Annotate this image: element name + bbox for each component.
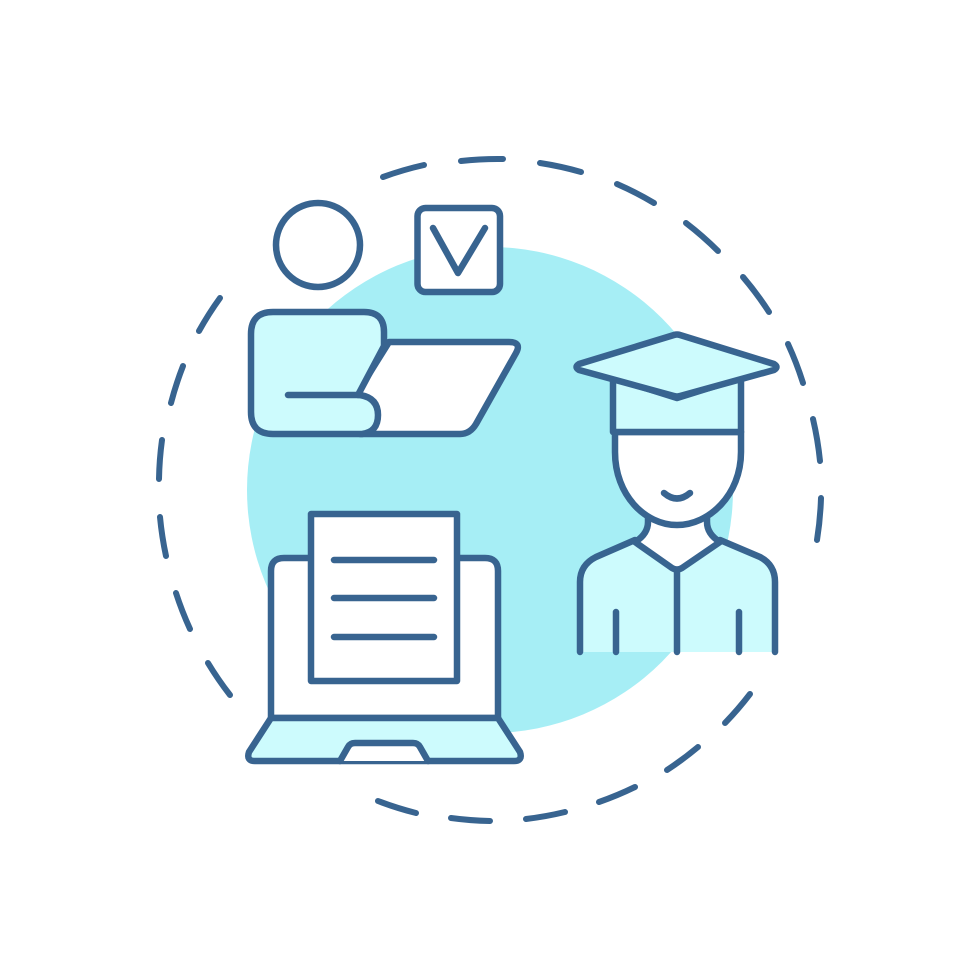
trackpad notch bbox=[340, 743, 428, 761]
document bbox=[311, 514, 457, 681]
icon: person at laptop bbox=[251, 203, 518, 434]
face bbox=[615, 432, 741, 525]
head bbox=[276, 203, 360, 287]
icon: laptop with document bbox=[248, 514, 521, 761]
garment lines bbox=[616, 570, 739, 652]
laptop base bbox=[248, 718, 521, 761]
icon: graduate bbox=[576, 334, 776, 652]
smile bbox=[664, 493, 690, 498]
background circle bbox=[247, 247, 733, 733]
body bbox=[580, 540, 775, 652]
checkbox bbox=[418, 208, 500, 292]
cap top bbox=[576, 334, 776, 396]
open laptop screen bbox=[356, 342, 518, 434]
document lines bbox=[334, 560, 434, 637]
cap base bbox=[613, 378, 741, 432]
laptop screen bbox=[271, 558, 498, 718]
torso bbox=[251, 312, 384, 434]
arm line bbox=[288, 392, 360, 398]
dashed ring bbox=[159, 159, 821, 821]
neck and collar bbox=[635, 515, 720, 570]
